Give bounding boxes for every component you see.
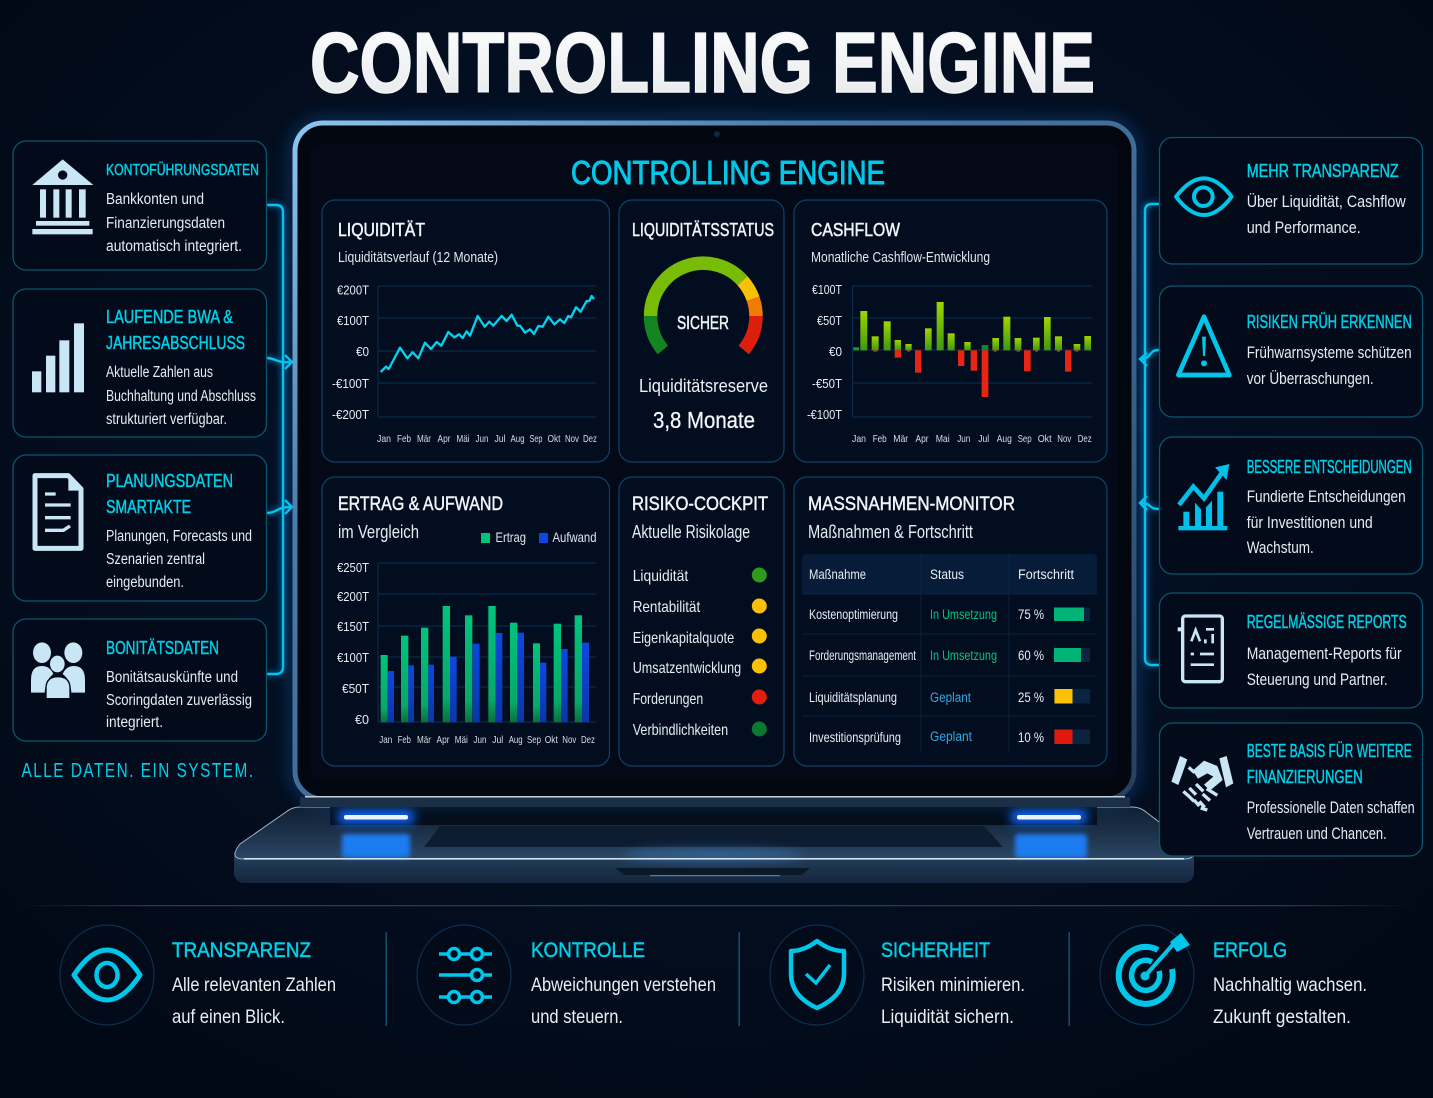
- line chart: liquidity: Mär: [417, 433, 431, 445]
- laptop screen: [293, 121, 1136, 807]
- icon: growth chart: [1178, 464, 1229, 530]
- icon: warning: [1178, 317, 1229, 375]
- benefit text: Alle relevanten Zahlen: [172, 974, 336, 996]
- icon: target: [1100, 925, 1194, 1025]
- bar chart: Ertrag und Aufwand: Aug: [509, 734, 523, 746]
- table: Fortschritt: [1018, 567, 1074, 582]
- risk list: Rentabilität: [633, 599, 701, 616]
- line chart: liquidity: -€200T: [332, 407, 369, 422]
- card title: FINANZIERUNGEN: [1247, 767, 1363, 787]
- card: Risiken früh erkennen: [1160, 286, 1422, 417]
- risk list: Forderungen: [633, 691, 703, 708]
- heading: CASHFLOW: [811, 220, 900, 240]
- bar chart: Ertrag und Aufwand: €250T: [337, 560, 369, 575]
- bar chart: Ertrag und Aufwand: €100T: [337, 650, 369, 665]
- risk list: Umsatzentwicklung: [633, 660, 741, 677]
- panel: Risiko-Cockpit: [619, 477, 784, 766]
- card: Mehr Transparenz: [1160, 138, 1422, 264]
- bar chart: cashflow: Jul: [978, 433, 989, 445]
- bar chart: cashflow: Mär: [893, 433, 909, 445]
- benefit text: [172, 974, 336, 1028]
- icon: eye: [60, 925, 154, 1025]
- table: Kostenoptimierung: [809, 607, 898, 622]
- card text: [106, 364, 256, 428]
- legend: Ertrag: [496, 529, 526, 545]
- benefit text: und steuern.: [531, 1006, 623, 1028]
- card title: LAUFENDE BWA &: [106, 307, 233, 327]
- line chart: liquidity: Okt: [548, 433, 561, 445]
- card text: [106, 191, 242, 255]
- card text: [1247, 193, 1406, 237]
- line chart: liquidity: Mäi: [456, 433, 470, 445]
- bar chart: cashflow: Sep: [1018, 433, 1032, 445]
- card text: Bankkonten und: [106, 191, 204, 208]
- panel: Maßnahmen-Monitor: [794, 477, 1107, 766]
- card: Laufende BWA und Jahresabschluss: [13, 289, 266, 437]
- bar chart: Ertrag und Aufwand: Jan: [379, 734, 392, 746]
- bar chart: Ertrag und Aufwand: €200T: [337, 589, 369, 604]
- benefit text: Risiken minimieren.: [881, 974, 1025, 996]
- benefit text: [531, 974, 716, 1028]
- bar chart: cashflow: Aug: [997, 433, 1012, 445]
- card title: JAHRESABSCHLUSS: [106, 333, 245, 353]
- table: Investitionsprüfung: [809, 730, 901, 745]
- table: Liquiditätsplanung: [809, 690, 897, 705]
- heading: ERTRAG & AUFWAND: [338, 493, 503, 515]
- bar chart: Ertrag und Aufwand: Jul: [492, 734, 503, 746]
- icon: people: [31, 642, 85, 699]
- line chart: liquidity: Jul: [494, 433, 506, 445]
- bar chart: cashflow: [807, 282, 1092, 445]
- card title: SMARTAKTE: [106, 497, 191, 517]
- line chart: liquidity: Feb: [397, 433, 411, 445]
- card text: integriert.: [106, 714, 163, 731]
- card text: vor Überraschungen.: [1247, 370, 1374, 388]
- benefit text: [881, 974, 1025, 1028]
- line chart: liquidity: [332, 282, 597, 445]
- bar chart: cashflow: €0: [829, 344, 842, 359]
- line chart: liquidity: €0: [356, 344, 369, 359]
- benefit: Erfolg: [1100, 925, 1367, 1028]
- benefit text: Nachhaltig wachsen.: [1213, 974, 1367, 996]
- bar chart: Ertrag und Aufwand: [337, 560, 596, 746]
- line chart: liquidity: Dez: [583, 433, 597, 445]
- line chart: liquidity: Apr: [438, 433, 451, 445]
- bar chart: Ertrag und Aufwand: Jun: [474, 734, 487, 746]
- icon: shield: [770, 925, 864, 1025]
- bar chart: cashflow: -€50T: [812, 376, 842, 391]
- card title: MEHR TRANSPARENZ: [1247, 161, 1399, 181]
- title: CONTROLLING ENGINE: [310, 16, 1095, 111]
- line chart: liquidity: €200T: [337, 282, 369, 298]
- card text: [1247, 344, 1412, 388]
- benefit heading: TRANSPARENZ: [172, 939, 311, 962]
- line chart: liquidity: Nov: [565, 433, 580, 445]
- camera: [714, 131, 720, 137]
- card text: [1247, 645, 1402, 689]
- table: In Umsetzung: [930, 648, 997, 663]
- table: Geplant: [930, 690, 971, 705]
- gauge: [651, 263, 756, 350]
- card text: automatisch integriert.: [106, 238, 242, 255]
- card text: strukturiert verfügbar.: [106, 411, 227, 428]
- table: 75 %: [1018, 607, 1044, 622]
- card text: Bonitätsauskünfte und: [106, 669, 238, 686]
- subheading: Aktuelle Risikolage: [632, 522, 750, 542]
- benefit: Transparenz: [60, 925, 336, 1028]
- heading: LIQUIDITÄT: [338, 220, 425, 240]
- card: Bonitätsdaten: [13, 619, 266, 741]
- connector: left data inputs: [266, 205, 292, 674]
- line chart: liquidity: Aug: [510, 433, 525, 445]
- bar chart: cashflow: Dez: [1078, 433, 1092, 445]
- card title: PLANUNGSDATEN: [106, 471, 233, 491]
- icon: bank: [32, 159, 93, 234]
- heading: RISIKO-COCKPIT: [632, 493, 768, 515]
- icon: document: [35, 476, 81, 548]
- bar chart: cashflow: Mai: [936, 433, 950, 445]
- card text: Planungen, Forecasts und: [106, 528, 252, 545]
- card: Kontoführungsdaten: [13, 141, 266, 270]
- bar chart: Ertrag und Aufwand: Apr: [436, 734, 450, 746]
- heading: LIQUIDITÄTSSTATUS: [632, 220, 774, 240]
- card text: [1247, 488, 1406, 557]
- card text: Über Liquidität, Cashflow: [1247, 193, 1406, 211]
- card: Regelmäßige Reports: [1160, 593, 1422, 708]
- gauge label: SICHER: [677, 313, 729, 333]
- risk list: Verbindlichkeiten: [633, 722, 728, 739]
- heading: MASSNAHMEN-MONITOR: [808, 493, 1015, 515]
- table: 10 %: [1018, 730, 1044, 745]
- table: In Umsetzung: [930, 607, 997, 622]
- card text: [106, 669, 252, 731]
- card text: [106, 528, 252, 591]
- bar chart: Ertrag und Aufwand: Mär: [417, 734, 431, 746]
- panel: Liquidität: [322, 200, 610, 462]
- benefit: Kontrolle: [417, 925, 716, 1028]
- benefit text: Zukunft gestalten.: [1213, 1006, 1351, 1028]
- card text: Aktuelle Zahlen aus: [106, 364, 213, 381]
- benefit heading: ERFOLG: [1213, 939, 1287, 962]
- card: Bessere Entscheidungen: [1160, 437, 1422, 574]
- subheading: Liquiditätsverlauf (12 Monate): [338, 249, 498, 266]
- subheading: Maßnahmen & Fortschritt: [808, 522, 973, 542]
- bar chart: Ertrag und Aufwand: €0: [355, 712, 369, 727]
- bar chart: Ertrag und Aufwand: Sep: [527, 734, 541, 746]
- laptop base: [234, 807, 1194, 883]
- icon: report: [1178, 616, 1222, 682]
- card title: KONTOFÜHRUNGSDATEN: [106, 161, 259, 179]
- legend: [481, 529, 596, 545]
- reserve label: Liquiditätsreserve: [639, 375, 768, 396]
- table: Forderungsmanagement: [809, 648, 916, 663]
- bar chart: cashflow: €50T: [817, 313, 842, 328]
- card text: Steuerung und Partner.: [1247, 671, 1388, 689]
- reserve value: 3,8 Monate: [653, 407, 755, 433]
- line chart: liquidity: -€100T: [332, 376, 369, 391]
- card text: Scoringdaten zuverlässig: [106, 692, 252, 709]
- table: [802, 554, 1097, 753]
- bar chart: Ertrag und Aufwand: Dez: [581, 734, 595, 746]
- subheading: Monatliche Cashflow-Entwicklung: [811, 249, 990, 266]
- icon: bar chart: [32, 323, 84, 392]
- bar chart: cashflow: Jun: [957, 433, 970, 445]
- bar chart: cashflow: -€100T: [807, 407, 842, 422]
- table: Maßnahme: [809, 567, 866, 582]
- panel: Ertrag und Aufwand: [322, 477, 610, 766]
- bar chart: Ertrag und Aufwand: Nov: [562, 734, 577, 746]
- connector: right outputs: [1140, 204, 1159, 665]
- card: Planungsdaten Smartakte: [13, 455, 266, 601]
- card text: Finanzierungsdaten: [106, 215, 225, 232]
- bar chart: Ertrag und Aufwand: Mäi: [455, 734, 468, 746]
- table: 60 %: [1018, 648, 1044, 663]
- card text: [1247, 799, 1415, 843]
- card text: Wachstum.: [1247, 539, 1314, 557]
- bar chart: Ertrag und Aufwand: €150T: [337, 619, 369, 634]
- subheading: im Vergleich: [338, 522, 419, 542]
- dashboard heading: CONTROLLING ENGINE: [571, 154, 885, 191]
- benefit text: Abweichungen verstehen: [531, 974, 716, 996]
- line chart: liquidity: €100T: [337, 313, 369, 328]
- bar chart: cashflow: Jan: [852, 433, 866, 445]
- card title: [106, 307, 245, 353]
- card: Beste Basis für weitere Finanzierungen: [1160, 723, 1422, 856]
- bar chart: cashflow: Feb: [873, 433, 887, 445]
- bar chart: cashflow: €100T: [812, 282, 842, 297]
- card title: [106, 471, 233, 517]
- icon: sliders: [417, 925, 511, 1025]
- benefit text: auf einen Blick.: [172, 1006, 285, 1028]
- card title: BONITÄTSDATEN: [106, 638, 219, 658]
- benefit heading: SICHERHEIT: [881, 939, 990, 962]
- table: 25 %: [1018, 690, 1044, 705]
- tagline: ALLE DATEN. EIN SYSTEM.: [22, 760, 254, 782]
- card text: Management-Reports für: [1247, 645, 1402, 663]
- card title: [1247, 741, 1412, 787]
- icon: eye: [1176, 178, 1232, 215]
- benefit heading: KONTROLLE: [531, 939, 645, 962]
- bar chart: cashflow: Okt: [1038, 433, 1052, 445]
- benefit text: Liquidität sichern.: [881, 1006, 1014, 1028]
- card text: für Investitionen und: [1247, 514, 1373, 532]
- bar chart: cashflow: Nov: [1057, 433, 1072, 445]
- risk list: Liquidität: [633, 568, 689, 585]
- bar chart: Ertrag und Aufwand: Okt: [545, 734, 558, 746]
- bar chart: cashflow: Apr: [916, 433, 929, 445]
- benefit text: [1213, 974, 1367, 1028]
- risk list: [633, 568, 767, 739]
- bar chart: Ertrag und Aufwand: Feb: [398, 734, 411, 746]
- line chart: liquidity: Jan: [377, 433, 391, 445]
- card text: eingebunden.: [106, 574, 184, 591]
- bar chart: Ertrag und Aufwand: €50T: [342, 681, 369, 696]
- panel: Cashflow: [794, 200, 1107, 462]
- panel: Liquiditätsstatus: [619, 200, 784, 462]
- card text: Vertrauen und Chancen.: [1247, 825, 1387, 843]
- risk list: Eigenkapitalquote: [633, 630, 734, 647]
- icon: handshake: [1171, 756, 1233, 810]
- card text: Szenarien zentral: [106, 551, 205, 568]
- legend: Aufwand: [552, 529, 596, 545]
- table: Status: [930, 567, 964, 582]
- benefit: Sicherheit: [770, 925, 1025, 1028]
- card text: und Performance.: [1247, 219, 1361, 237]
- line chart: liquidity: Jun: [476, 433, 489, 445]
- table: Geplant: [930, 729, 972, 744]
- card text: Buchhaltung und Abschluss: [106, 388, 256, 405]
- line chart: liquidity: Sep: [530, 433, 543, 445]
